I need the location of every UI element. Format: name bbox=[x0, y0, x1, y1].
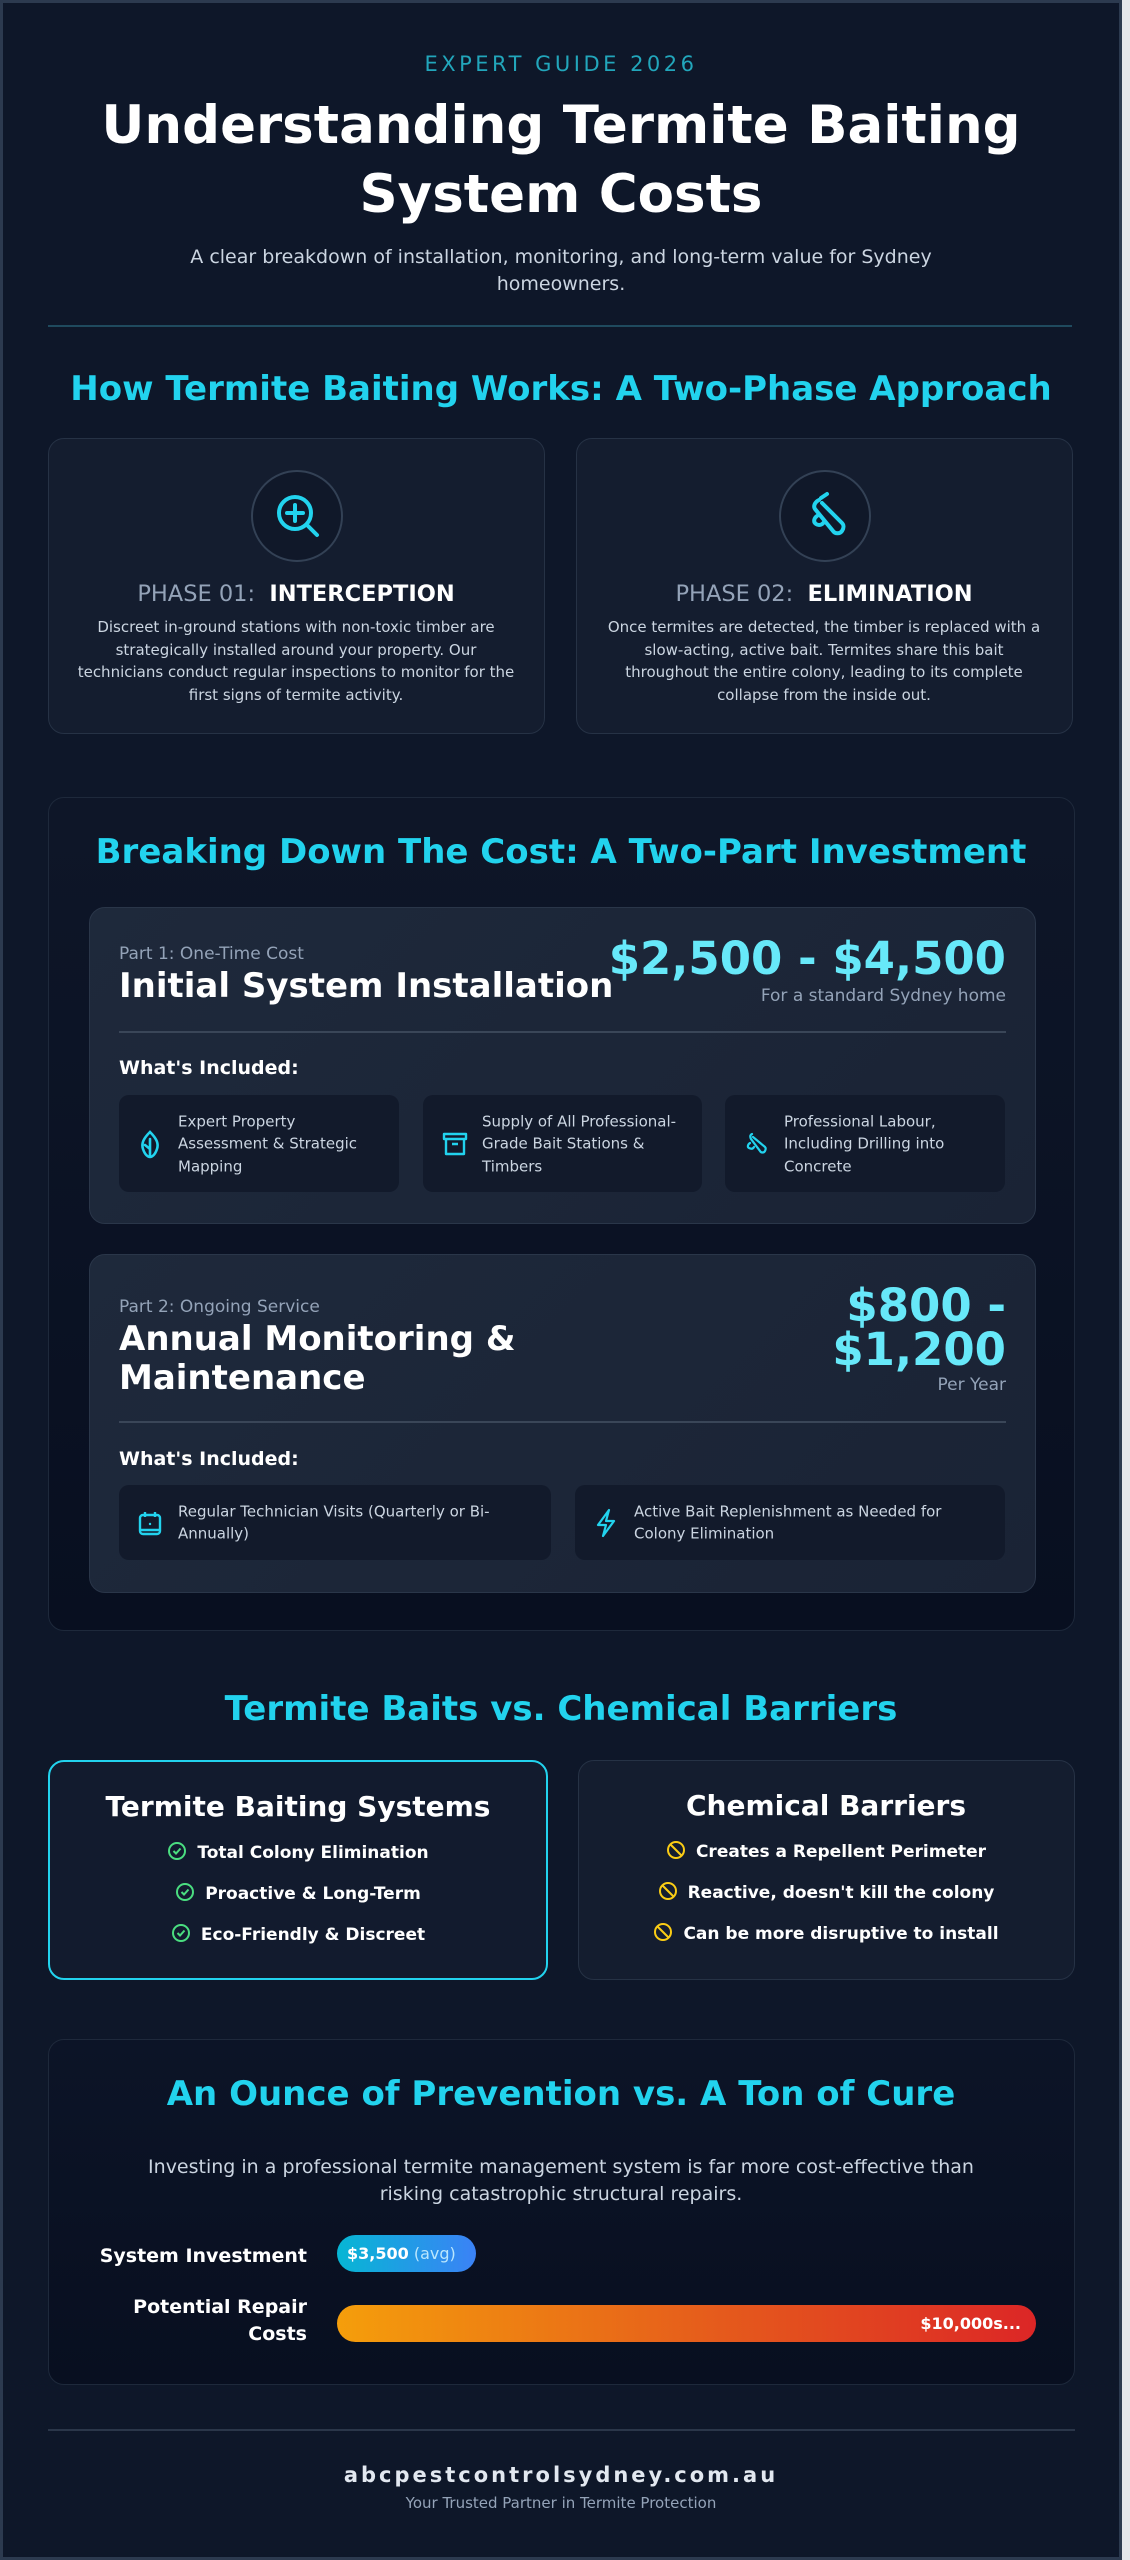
item: supply: Supply of All Professional-Grade Bait Stations & Timbers bbox=[482, 1112, 676, 1175]
label part 1: Part 1: One-Time Cost bbox=[119, 944, 304, 964]
bar repair costs: $10,000s... bbox=[920, 2314, 1021, 2333]
phase title: PHASE 02: ELIMINATION bbox=[675, 581, 973, 607]
what's included: What's Included: bbox=[119, 1057, 299, 1079]
icon: magnifier bbox=[251, 470, 343, 562]
price: $2,500 - $4,500 bbox=[609, 932, 1006, 985]
cons list: Reactive, doesn't kill the colony bbox=[688, 1883, 994, 1903]
item: assessment: Expert Property Assessment & Strategic Mapping bbox=[178, 1112, 357, 1175]
heading installation: Initial System Installation bbox=[119, 966, 613, 1006]
price note: For a standard Sydney home bbox=[761, 986, 1006, 1006]
panel: termite baiting systems bbox=[48, 1760, 548, 1980]
phase description: Once termites are detected, the timber is replaced with a slow-acting, active bait. Termites share this bait throughout the entire colony, leading to its complete collapse from the inside out. bbox=[608, 618, 1040, 704]
cons list: Can be more disruptive to install bbox=[683, 1924, 999, 1944]
pros list bbox=[168, 1842, 429, 1945]
footer: tagline: Your Trusted Partner in Termite Protection bbox=[406, 2494, 716, 2512]
phase description: Discreet in-ground stations with non-toxic timber are strategically installed around your property. Our technicians conduct regular inspections to monitor for the first signs of termite activity. bbox=[78, 618, 514, 704]
price bbox=[832, 1279, 1006, 1376]
pros list: Proactive & Long-Term bbox=[205, 1884, 421, 1904]
item: bait replenishment bbox=[575, 1485, 1005, 1560]
item: bait replenishment: Active Bait Replenishment as Needed for Colony Elimination bbox=[634, 1502, 941, 1542]
panel: chemical barriers bbox=[578, 1760, 1075, 1980]
heading: baits vs chemical: Termite Baits vs. Chemical Barriers bbox=[225, 1689, 897, 1729]
item: labour: Professional Labour, Including Drilling into Concrete bbox=[784, 1112, 944, 1175]
panel: phase 01 bbox=[48, 438, 545, 734]
paragraph: Investing in a professional termite management system is far more cost-effective than risking catastrophic structural repairs. bbox=[148, 2156, 974, 2205]
panel title: Termite Baiting Systems bbox=[106, 1790, 490, 1823]
card: annual monitoring bbox=[89, 1254, 1036, 1593]
icon: tools bbox=[779, 470, 871, 562]
eyebrow: expert guide: EXPERT GUIDE 2026 bbox=[424, 52, 698, 76]
price: $800 - bbox=[846, 1279, 1006, 1332]
cons list: Creates a Repellent Perimeter bbox=[696, 1842, 986, 1862]
price note: Per Year bbox=[938, 1375, 1006, 1395]
panel: phase 02 bbox=[576, 438, 1073, 734]
card: installation bbox=[89, 907, 1036, 1224]
cons list bbox=[654, 1841, 999, 1944]
footer: website: abcpestcontrolsydney.com.au bbox=[344, 2463, 778, 2487]
phase title: PHASE 01: INTERCEPTION bbox=[137, 581, 455, 607]
bar repair costs bbox=[337, 2305, 1036, 2342]
what's included: What's Included: bbox=[119, 1448, 299, 1470]
subtitle: A clear breakdown of installation, monitoring, and long-term value for Sydney homeowners. bbox=[190, 246, 932, 295]
item: visits: Regular Technician Visits (Quarterly or Bi-Annually) bbox=[178, 1502, 490, 1542]
panel title: Chemical Barriers bbox=[686, 1789, 966, 1822]
pros list: Total Colony Elimination bbox=[197, 1843, 429, 1863]
heading prevention: An Ounce of Prevention vs. A Ton of Cure bbox=[167, 2074, 955, 2114]
item: labour bbox=[725, 1095, 1005, 1192]
heading: how it works: How Termite Baiting Works: A Two-Phase Approach bbox=[70, 369, 1052, 409]
heading monitoring: Annual Monitoring & Maintenance bbox=[119, 1319, 515, 1398]
label repair costs bbox=[133, 2296, 307, 2345]
label part 2: Part 2: Ongoing Service bbox=[119, 1297, 320, 1317]
title: Understanding Termite Baiting System Costs bbox=[101, 95, 1021, 225]
item: visits bbox=[119, 1485, 551, 1560]
item: supply bbox=[423, 1095, 702, 1192]
bar chart: costs bbox=[100, 2235, 1036, 2345]
label repair costs: Potential Repair bbox=[133, 2296, 307, 2318]
bar system investment bbox=[337, 2235, 476, 2272]
pros list: Eco-Friendly & Discreet bbox=[201, 1925, 425, 1945]
price: $1,200 bbox=[832, 1323, 1006, 1376]
item: assessment bbox=[119, 1095, 399, 1192]
panel: cost breakdown bbox=[48, 797, 1075, 1631]
label system investment: System Investment bbox=[100, 2245, 307, 2267]
panel: prevention vs cure bbox=[48, 2039, 1075, 2385]
label repair costs: Costs bbox=[248, 2323, 307, 2345]
heading: cost: Breaking Down The Cost: A Two-Part Investment bbox=[96, 832, 1026, 872]
bar system investment: $3,500 (avg) bbox=[347, 2244, 456, 2263]
